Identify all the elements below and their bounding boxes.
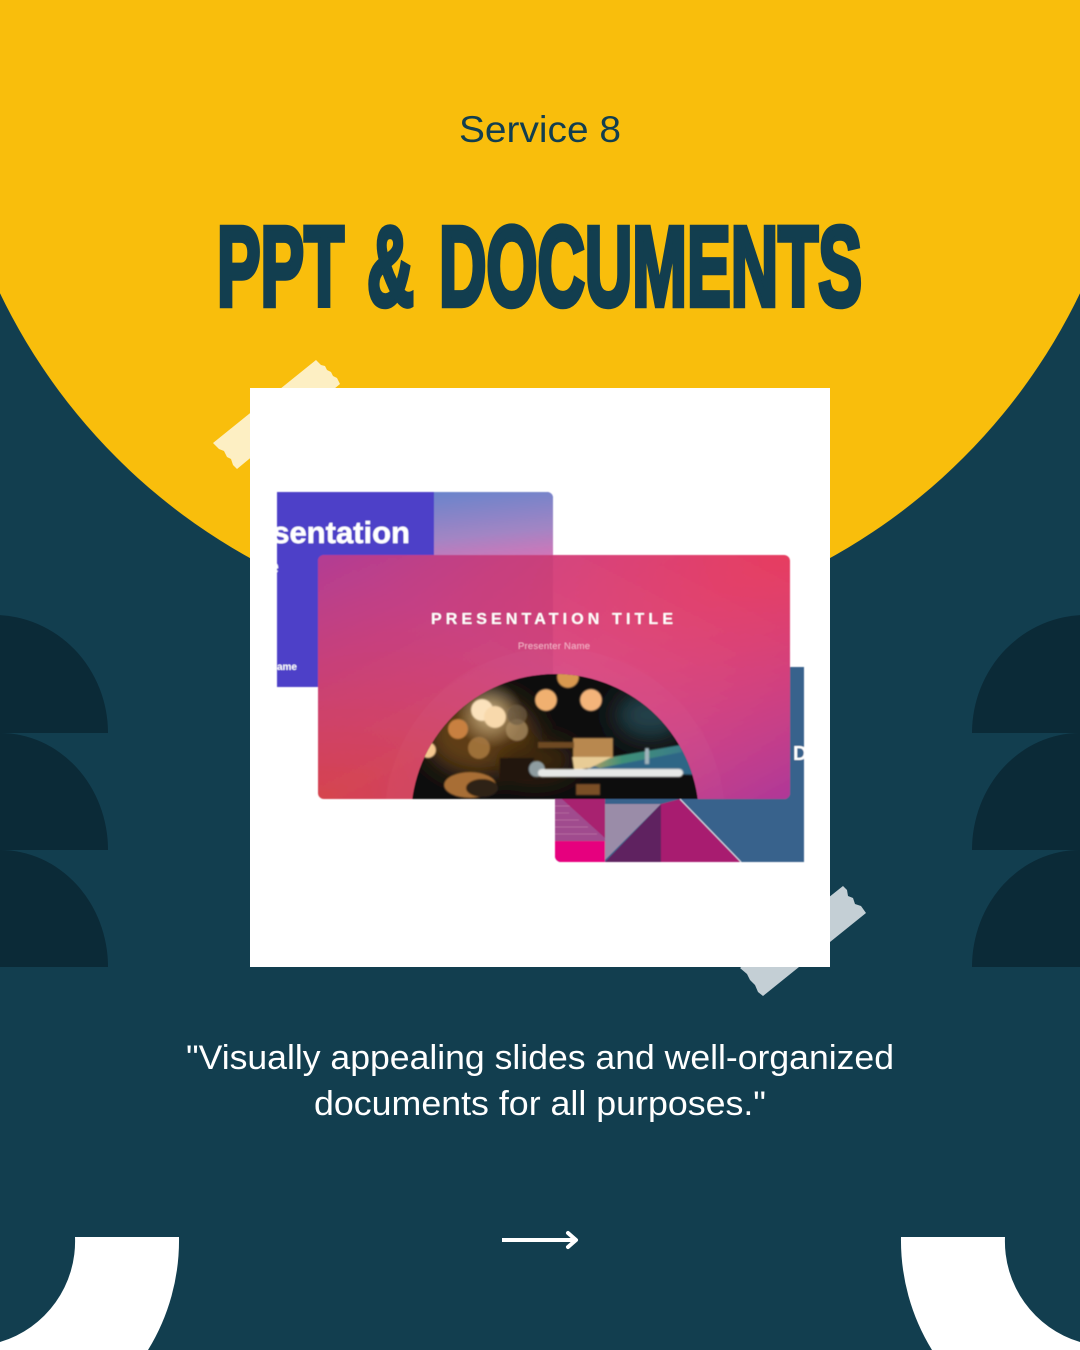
- right dark semicircle stack: [972, 615, 1080, 967]
- yellow circle header: [0, 0, 1080, 633]
- arrow icon: [502, 1233, 576, 1247]
- title: PPT: [217, 204, 344, 330]
- right slide: geometric blue: [555, 667, 807, 862]
- photo: turntable with bokeh: [405, 666, 705, 800]
- right slide: geometric blue: D: [793, 743, 807, 765]
- front slide: presentation title: PRESENTATION TITLE: [431, 611, 673, 628]
- white image card: [250, 388, 830, 967]
- back slide: blue presentation: Name: [270, 662, 297, 673]
- front slide: presentation title: Presenter Name: [518, 641, 590, 652]
- title: [217, 204, 862, 330]
- back slide: blue presentation: [276, 491, 554, 688]
- white arc: bottom right: [901, 1237, 1080, 1350]
- front slide: presentation title: [317, 554, 791, 800]
- description: documents for all purposes.": [314, 1085, 766, 1123]
- tape: bottom right: [740, 886, 866, 996]
- back slide: blue presentation: Presentation: [222, 515, 410, 550]
- white arc: bottom left: [0, 1237, 179, 1350]
- tape: top left: [213, 360, 340, 469]
- description: "Visually appealing slides and well-organized: [186, 1039, 894, 1077]
- back slide: blue presentation: e: [267, 554, 279, 579]
- slide collage: [276, 491, 805, 863]
- left dark semicircle stack: [0, 615, 108, 967]
- service label: Service 8: [459, 109, 621, 150]
- title: &: [367, 204, 414, 330]
